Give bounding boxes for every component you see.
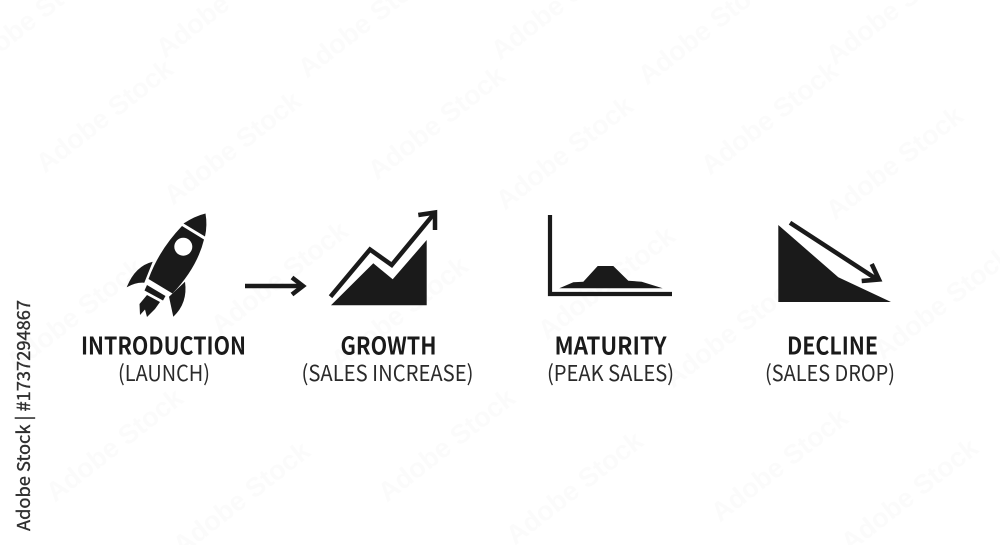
watermark pattern: Adobe Stock	[820, 100, 969, 226]
watermark pattern: Adobe Stock	[695, 55, 844, 181]
label: decline: (SALES DROP)	[765, 356, 895, 388]
label: growth	[302, 326, 474, 388]
label: introduction: (LAUNCH)	[118, 356, 210, 388]
watermark pattern: Adobe Stock	[205, 215, 354, 341]
label: introduction: INTRODUCTION	[81, 326, 246, 362]
icon: maturity chart	[550, 215, 672, 294]
watermark pattern: Adobe Stock	[0, 252, 149, 378]
watermark pattern: Adobe Stock	[372, 382, 521, 508]
label: decline: DECLINE	[787, 326, 878, 362]
watermark pattern: Adobe Stock	[362, 60, 511, 186]
watermark pattern: Adobe Stock	[40, 382, 189, 508]
label: growth: (SALES INCREASE)	[302, 356, 474, 388]
watermark pattern: Adobe Stock	[158, 85, 307, 211]
watermark pattern: Adobe Stock	[658, 268, 807, 394]
label: decline	[765, 326, 895, 388]
icon: decline chart	[778, 223, 891, 302]
watermark pattern: Adobe Stock	[532, 220, 681, 346]
icon: growth chart	[330, 212, 435, 305]
watermark pattern: Adobe Stock	[490, 90, 639, 216]
watermark pattern: Adobe Stock	[705, 402, 854, 528]
stock credit vertical text: Adobe Stock | #1737294867	[10, 300, 36, 531]
label: growth: GROWTH	[340, 326, 436, 362]
label: maturity	[547, 326, 674, 388]
label: maturity: MATURITY	[554, 326, 668, 362]
label: introduction	[81, 326, 246, 388]
watermark pattern: Adobe Stock	[325, 250, 474, 376]
icon: rocket	[127, 214, 206, 317]
arrow: introduction to growth	[245, 278, 303, 294]
watermark pattern: Adobe Stock	[30, 53, 179, 179]
label: maturity: (PEAK SALES)	[547, 356, 674, 388]
